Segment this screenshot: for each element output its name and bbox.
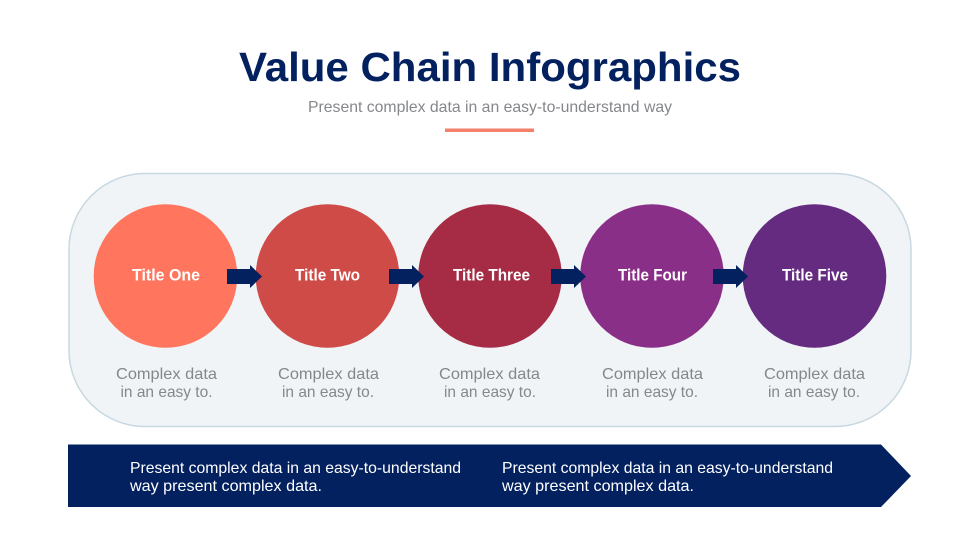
step 1 description: Complex data <box>116 366 217 383</box>
step 2 description: Complex data <box>278 366 379 383</box>
step 3 circle <box>418 204 562 348</box>
step 1 circle <box>94 204 237 348</box>
step 4 description <box>602 366 703 401</box>
panel: value chain <box>69 174 911 426</box>
step 5 description: Complex data <box>764 366 865 383</box>
step 4 description: Complex data <box>602 366 703 383</box>
step 1 description <box>116 366 217 401</box>
step 1 description: in an easy to. <box>120 384 212 401</box>
step 4 title: Title Four <box>618 266 688 284</box>
subtitle: Present complex data in an easy-to-understand way <box>308 99 672 116</box>
step 3 title: Title Three <box>453 266 530 284</box>
banner text left: way present complex data. <box>129 478 322 495</box>
step 2 description: in an easy to. <box>282 384 374 401</box>
arrow 4 <box>713 265 748 288</box>
panel background <box>69 174 911 426</box>
arrow 1 <box>227 265 262 288</box>
arrow 2 <box>389 265 424 288</box>
step 2 description <box>278 366 379 401</box>
step 3 description: Complex data <box>439 366 540 383</box>
step 3 description <box>439 366 540 401</box>
banner arrow <box>68 444 911 507</box>
banner shape <box>68 444 911 507</box>
step 2 circle <box>256 204 399 348</box>
step 2 title: Title Two <box>295 266 360 284</box>
title: Value Chain Infographics <box>239 44 741 90</box>
banner text right: Present complex data in an easy-to-understand <box>502 460 833 477</box>
banner text left <box>129 460 461 495</box>
step 4 circle <box>580 204 724 348</box>
step 5 title: Title Five <box>782 266 848 284</box>
step 1 title: Title One <box>132 266 200 284</box>
banner text right: way present complex data. <box>501 478 694 495</box>
step 4 description: in an easy to. <box>606 384 698 401</box>
banner text right <box>501 460 833 495</box>
step 5 description: in an easy to. <box>768 384 860 401</box>
arrow 3 <box>551 265 586 288</box>
banner text left: Present complex data in an easy-to-understand <box>130 460 461 477</box>
step 5 circle <box>743 204 886 348</box>
step 5 description <box>764 366 865 401</box>
accent rule <box>445 128 534 132</box>
step 3 description: in an easy to. <box>444 384 536 401</box>
